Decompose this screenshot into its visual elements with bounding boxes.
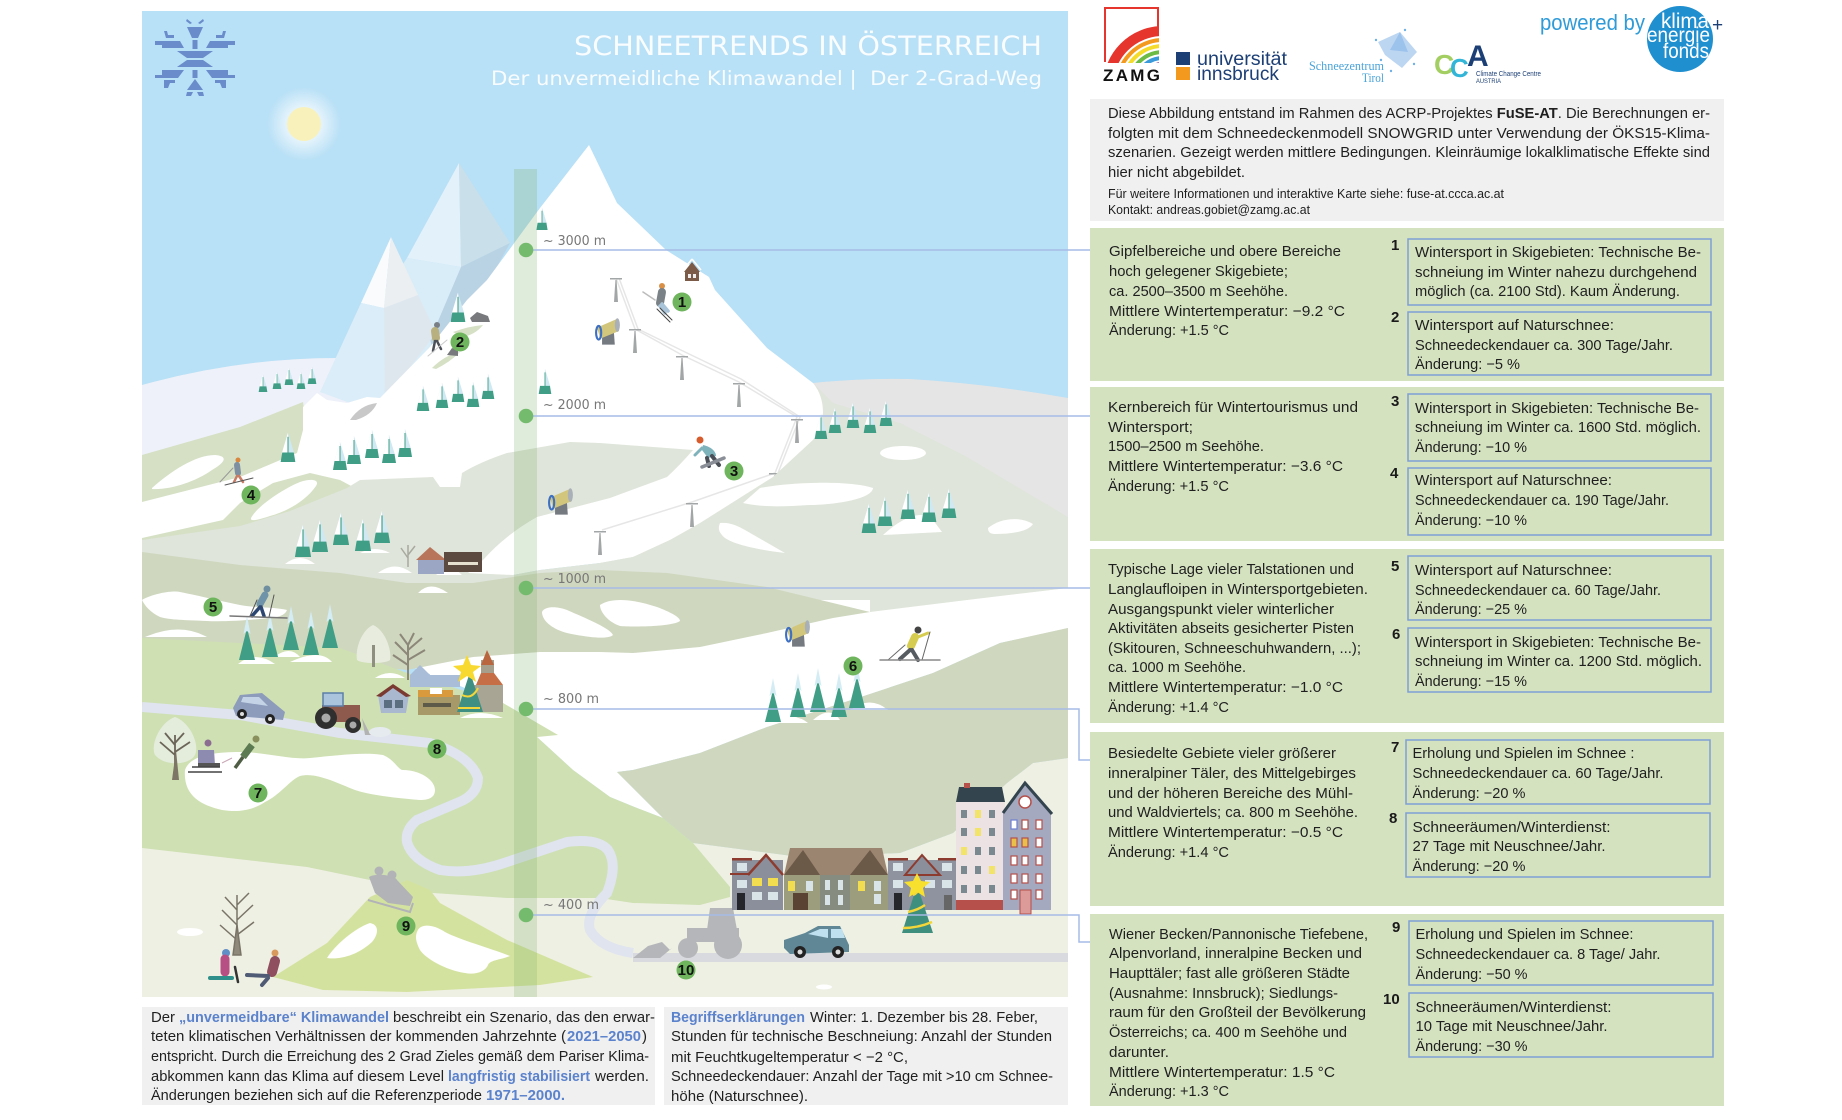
logo: Universität Innsbruck: innsbruck bbox=[1197, 64, 1279, 85]
numbered markers: 2 bbox=[456, 334, 464, 351]
altitude leader lines bbox=[526, 250, 1090, 942]
box 9: Schneedeckendauer ca. 8 Tage/ Jahr. bbox=[1416, 946, 1660, 963]
description 2000 m: 1500–2500 m Seehöhe. bbox=[1108, 438, 1264, 455]
intro panel: szenarien. Gezeigt werden mittlere Bedingungen. Kleinräumige lokalklimatische Effekte sind bbox=[1108, 144, 1710, 161]
text panel: Begriffserklärungen: Schneedeckendauer: Anzahl der Tage mit >10 cm Schnee- bbox=[671, 1068, 1053, 1085]
intro panel: hier nicht abgebildet. bbox=[1108, 164, 1245, 181]
snow band bbox=[407, 588, 1068, 818]
house group right bbox=[888, 855, 956, 910]
village buildings bbox=[376, 665, 460, 715]
subtitle: Der unvermeidliche Klimawandel | Der 2-Grad-Weg bbox=[491, 67, 1042, 90]
description 3000 m: Mittlere Wintertemperatur: −9.2 °C bbox=[1109, 303, 1345, 320]
icon: snowflake logo bbox=[155, 19, 235, 96]
box 10: Änderung: −30 % bbox=[1416, 1038, 1528, 1055]
logo: CCCA: C bbox=[1450, 53, 1469, 83]
sitting people bbox=[210, 949, 278, 985]
box 2: Schneedeckendauer ca. 300 Tage/Jahr. bbox=[1415, 337, 1673, 354]
numbered markers bbox=[204, 292, 862, 980]
gray tobogganers 9 bbox=[368, 866, 413, 912]
text panel: Begriffserklärungen: Winter: 1. Dezember bis 28. Feber, bbox=[810, 1009, 1038, 1026]
ski tourer 4 bbox=[220, 458, 253, 485]
box 3: Wintersport in Skigebieten: Technische Be- bbox=[1415, 400, 1699, 417]
logo: CCCA: A bbox=[1467, 40, 1489, 73]
description 1000 m: Änderung: +1.4 °C bbox=[1108, 699, 1229, 716]
box 9: Änderung: −50 % bbox=[1416, 966, 1528, 983]
box 5: Änderung: −25 % bbox=[1415, 601, 1527, 618]
lift posts bbox=[594, 278, 803, 555]
rocks bbox=[350, 312, 490, 420]
description 400 m: Wiener Becken/Pannonische Tiefebene, bbox=[1109, 926, 1368, 943]
intro panel bbox=[1090, 99, 1724, 221]
description 1000 m: Typische Lage vieler Talstationen und bbox=[1108, 561, 1354, 578]
snow patches in valley bbox=[142, 592, 680, 638]
small bare tree bbox=[401, 545, 415, 567]
description 400 m: raum für den Großteil der Bevölkerung bbox=[1109, 1004, 1366, 1021]
description 400 m: (Ausnahme: Innsbruck); Siedlungs- bbox=[1109, 985, 1338, 1002]
box 1: schneiung im Winter nahezu durchgehend bbox=[1415, 264, 1697, 281]
blue tall house bbox=[1003, 782, 1052, 914]
numbered markers: 5 bbox=[209, 599, 217, 616]
snow patch left hill bbox=[152, 455, 224, 489]
snow mounds bbox=[145, 549, 888, 723]
house group left bbox=[730, 855, 783, 910]
house upper village bbox=[416, 547, 482, 574]
snow patches on right valley bbox=[719, 446, 1033, 553]
snowboarder 3 bbox=[695, 436, 724, 467]
logo: powered by Klima- und Energiefonds: energie bbox=[1647, 24, 1710, 47]
text panel: unvermeidbarer Klimawandel: langfristig stabilisiert bbox=[448, 1068, 590, 1085]
box 6 bbox=[1392, 626, 1711, 692]
description 800 m: inneralpiner Täler, des Mittelgebirges bbox=[1108, 765, 1356, 782]
back peak bbox=[384, 163, 510, 376]
logo: CCCA: AUSTRIA bbox=[1476, 78, 1502, 85]
text panel: unvermeidbarer Klimawandel: 2021–2050 bbox=[567, 1028, 641, 1045]
description 400 m: darunter. bbox=[1109, 1044, 1169, 1061]
skier 1 bbox=[643, 283, 672, 322]
description 800 m: und der höheren Bereiche des Mühl- bbox=[1108, 785, 1353, 802]
panel: 2000 m zone bbox=[1090, 387, 1724, 541]
skier 5 bbox=[230, 586, 287, 618]
description 1000 m: ca. 1000 m Seehöhe. bbox=[1108, 659, 1246, 676]
box 2 bbox=[1391, 309, 1711, 375]
car upper bbox=[233, 693, 285, 724]
box 10: 10 Tage mit Neuschnee/Jahr. bbox=[1416, 1018, 1608, 1035]
numbered markers: 10 bbox=[678, 962, 694, 979]
logo: Schneezentrum Tirol: Schneezentrum bbox=[1309, 58, 1384, 73]
dark valley layer bbox=[142, 552, 870, 670]
box 5 bbox=[1391, 556, 1711, 620]
cable car line bbox=[602, 278, 800, 530]
logo: Schneezentrum Tirol: Tirol bbox=[1362, 70, 1384, 85]
green hill bbox=[142, 638, 730, 905]
description 1000 m: (Skitouren, Schneeschuhwandern, ...); bbox=[1108, 640, 1361, 657]
text panel: unvermeidbarer Klimawandel: 1971–2000. bbox=[486, 1087, 565, 1104]
box 4: 4 bbox=[1390, 465, 1399, 482]
description 3000 m bbox=[1109, 243, 1345, 339]
box 3: 3 bbox=[1391, 393, 1399, 410]
logo: Universität Innsbruck: universität bbox=[1197, 49, 1288, 70]
box 6: Änderung: −15 % bbox=[1415, 673, 1527, 690]
description 3000 m: Änderung: +1.5 °C bbox=[1109, 322, 1229, 339]
box 3: schneiung im Winter ca. 1600 Std. möglich. bbox=[1415, 419, 1701, 436]
text panel: unvermeidbarer Klimawandel: teten klimatischen Verhältnissen der kommenden Jahrzehnte ( bbox=[151, 1028, 566, 1045]
text panel: Begriffserklärungen: Begriffserklärungen bbox=[671, 1009, 805, 1026]
intro panel: Diese Abbildung entstand im Rahmen des ACRP-Projektes FuSE-AT. Die Berechnungen er- bbox=[1108, 105, 1710, 122]
numbered markers: 6 bbox=[849, 658, 857, 675]
icon: sun bbox=[271, 91, 337, 157]
panel: 3000 m zone bbox=[1090, 228, 1724, 381]
box 9: 9 bbox=[1392, 919, 1400, 936]
climber 2 bbox=[428, 322, 447, 356]
text panel: unvermeidbarer Klimawandel: entspricht. Durch die Erreichung des 2 Grad Zieles gemäß dem Pariser Klima- bbox=[151, 1048, 649, 1065]
altitude dots bbox=[519, 243, 533, 922]
lower dark valley bbox=[617, 628, 1068, 857]
logo: CCCA: Climate Change Centre bbox=[1476, 69, 1541, 78]
right valley layer bbox=[601, 386, 1058, 563]
description 800 m: Änderung: +1.4 °C bbox=[1108, 844, 1229, 861]
beige lowland bbox=[142, 758, 1068, 997]
text panel: unvermeidbarer Klimawandel: Änderungen beziehen sich auf die Referenzperiode bbox=[151, 1087, 482, 1104]
box 6: schneiung im Winter ca. 1200 Std. möglich. bbox=[1415, 653, 1702, 670]
box 2: Wintersport auf Naturschnee: bbox=[1415, 317, 1614, 334]
box 8 bbox=[1389, 810, 1710, 877]
box 10: 10 bbox=[1383, 991, 1400, 1008]
description 3000 m: Gipfelbereiche und obere Bereiche bbox=[1109, 243, 1341, 260]
front peak bbox=[320, 237, 436, 403]
box 7: 7 bbox=[1391, 739, 1399, 756]
description 2000 m: Mittlere Wintertemperatur: −3.6 °C bbox=[1108, 458, 1343, 475]
text panel: Begriffserklärungen: mit Feuchtkugeltemperatur < −2 °C, bbox=[671, 1049, 908, 1066]
logo: ZAMG bbox=[1103, 8, 1218, 141]
church bbox=[470, 650, 503, 712]
bare tree bbox=[220, 893, 254, 955]
box 4: Wintersport auf Naturschnee: bbox=[1415, 472, 1612, 489]
box 7 bbox=[1391, 739, 1710, 804]
box 6: Wintersport in Skigebieten: Technische Be- bbox=[1415, 634, 1701, 651]
numbered markers: 1 bbox=[678, 294, 686, 311]
box 8: 8 bbox=[1389, 810, 1397, 827]
numbered markers: 7 bbox=[254, 785, 262, 802]
box 4: Schneedeckendauer ca. 190 Tage/Jahr. bbox=[1415, 492, 1669, 509]
panel: mountain scene bbox=[142, 11, 1068, 997]
box 6: 6 bbox=[1392, 626, 1400, 643]
altitude labels: ~ 400 m bbox=[543, 898, 599, 913]
pink tall house bbox=[956, 783, 1005, 910]
text panel: unvermeidbarer Klimawandel: Der bbox=[151, 1009, 175, 1026]
text panel: unvermeidbarer Klimawandel: „unvermeidbare“ Klimawandel bbox=[179, 1009, 389, 1026]
box 1: 1 bbox=[1391, 237, 1399, 254]
box 1 bbox=[1391, 237, 1711, 305]
snow cannons bbox=[549, 318, 810, 647]
altitude band bbox=[514, 169, 537, 997]
numbered markers: 4 bbox=[247, 487, 256, 504]
car lower bbox=[784, 926, 849, 958]
box 1: möglich (ca. 2100 Std). Kaum Änderung. bbox=[1415, 283, 1680, 300]
description 1000 m: Langlaufloipen in Wintersportgebieten. bbox=[1108, 581, 1368, 598]
box 9: Erholung und Spielen im Schnee: bbox=[1416, 926, 1634, 943]
tractor upper bbox=[315, 693, 376, 735]
description 1000 m: Mittlere Wintertemperatur: −1.0 °C bbox=[1108, 679, 1343, 696]
altitude labels: ~ 1000 m bbox=[543, 572, 606, 587]
snow patch lower left bbox=[251, 480, 317, 520]
left green hill bbox=[142, 402, 304, 502]
christmas tree village bbox=[453, 655, 483, 712]
description 400 m: Alpenvorland, inneralpine Becken und bbox=[1109, 945, 1362, 962]
numbered markers: 8 bbox=[433, 741, 441, 758]
box 2: Änderung: −5 % bbox=[1415, 356, 1520, 373]
logo: CCCA bbox=[1434, 40, 1541, 85]
logo: powered by Klima- und Energiefonds: klima bbox=[1661, 10, 1709, 33]
mountain hut bbox=[683, 259, 701, 281]
description 800 m: Mittlere Wintertemperatur: −0.5 °C bbox=[1108, 824, 1343, 841]
box 4: Änderung: −10 % bbox=[1415, 512, 1527, 529]
text panel: unvermeidbarer Klimawandel bbox=[142, 1007, 655, 1105]
panel: 1000 m zone bbox=[1090, 549, 1724, 723]
snow on small hill bbox=[177, 923, 832, 990]
mansion bbox=[784, 848, 888, 910]
box 7: Schneedeckendauer ca. 60 Tage/Jahr. bbox=[1412, 765, 1664, 782]
description 2000 m: Wintersport; bbox=[1108, 419, 1193, 436]
title: SCHNEETRENDS IN ÖSTERREICH bbox=[574, 30, 1042, 62]
text panel: Begriffserklärungen bbox=[664, 1007, 1068, 1105]
box 3 bbox=[1391, 393, 1711, 461]
intro panel: folgten mit dem Schneedeckenmodell SNOWGRID unter Verwendung der ÖKS15-Klima- bbox=[1108, 124, 1710, 142]
town bbox=[730, 782, 1052, 914]
panel: 400 m zone bbox=[1090, 914, 1724, 1106]
box 5: Schneedeckendauer ca. 60 Tage/Jahr. bbox=[1415, 582, 1661, 599]
box 7: Erholung und Spielen im Schnee : bbox=[1412, 745, 1634, 762]
description 800 m: und Waldviertels; ca. 800 m Seehöhe. bbox=[1108, 804, 1358, 821]
description 3000 m: ca. 2500–3500 m Seehöhe. bbox=[1109, 283, 1288, 300]
small hill bbox=[273, 880, 593, 992]
christmas tree town bbox=[902, 873, 933, 933]
logo: powered by Klima- und Energiefonds bbox=[1540, 6, 1723, 72]
text panel: unvermeidbarer Klimawandel: beschreibt ein Szenario, das den erwar- bbox=[393, 1009, 655, 1026]
box 8: 27 Tage mit Neuschnee/Jahr. bbox=[1412, 838, 1606, 855]
box 7: Änderung: −20 % bbox=[1412, 785, 1526, 802]
logo: powered by Klima- und Energiefonds: powered by bbox=[1540, 10, 1645, 35]
far hills bbox=[142, 358, 1068, 517]
description 400 m: Österreichs; ca. 400 m Seehöhe und bbox=[1109, 1023, 1347, 1041]
snow pile plow bbox=[369, 727, 391, 737]
altitude labels: ~ 3000 m bbox=[543, 234, 606, 249]
box 4 bbox=[1390, 465, 1711, 535]
sledders bbox=[188, 736, 260, 772]
road bbox=[142, 707, 633, 953]
logo: CCCA: C bbox=[1434, 49, 1454, 80]
skier 6 bbox=[880, 626, 940, 660]
text panel: unvermeidbarer Klimawandel: abkommen kann das Klima auf diesem Level bbox=[151, 1068, 444, 1085]
box 8: Schneeräumen/Winterdienst: bbox=[1412, 819, 1610, 836]
numbered markers: 3 bbox=[730, 463, 738, 480]
box 1: Wintersport in Skigebieten: Technische Be- bbox=[1415, 244, 1701, 261]
main road bbox=[633, 953, 1068, 962]
box 8: Änderung: −20 % bbox=[1412, 858, 1526, 875]
logo: ZAMG: ZAMG bbox=[1103, 66, 1160, 85]
logo: Universität Innsbruck bbox=[1176, 49, 1288, 85]
logo: powered by Klima- und Energiefonds: + bbox=[1712, 15, 1723, 36]
box 10: Schneeräumen/Winterdienst: bbox=[1416, 999, 1612, 1016]
intro panel: Für weitere Informationen und interaktive Karte siehe: fuse-at.ccca.ac.at bbox=[1108, 187, 1505, 201]
text panel: unvermeidbarer Klimawandel: werden. bbox=[594, 1068, 649, 1085]
box 2: 2 bbox=[1391, 309, 1399, 326]
box 9 bbox=[1392, 919, 1713, 985]
tree 7 bbox=[154, 717, 196, 780]
description 800 m bbox=[1108, 745, 1358, 861]
description 1000 m: Ausgangspunkt vieler winterlicher bbox=[1108, 601, 1334, 618]
text panel: unvermeidbarer Klimawandel: ) bbox=[642, 1028, 647, 1045]
box 10 bbox=[1383, 991, 1713, 1057]
description 2000 m: Änderung: +1.5 °C bbox=[1108, 478, 1229, 495]
box 3: Änderung: −10 % bbox=[1415, 439, 1527, 456]
gray tractor 10 bbox=[633, 908, 742, 959]
green band lower left bbox=[142, 473, 353, 545]
conifers bbox=[239, 208, 956, 722]
description 400 m: Änderung: +1.3 °C bbox=[1109, 1083, 1229, 1100]
description 2000 m bbox=[1108, 399, 1358, 495]
box 5: Wintersport auf Naturschnee: bbox=[1415, 562, 1612, 579]
description 1000 m: Aktivitäten abseits gesicherter Pisten bbox=[1108, 620, 1354, 637]
description 3000 m: hoch gelegener Skigebiete; bbox=[1109, 263, 1288, 280]
main snow mountain bbox=[142, 145, 823, 620]
winter trees bbox=[357, 625, 425, 680]
description 400 m: Mittlere Wintertemperatur: 1.5 °C bbox=[1109, 1064, 1335, 1081]
description 1000 m bbox=[1108, 561, 1368, 716]
altitude labels: ~ 2000 m bbox=[543, 398, 606, 413]
snow patch 7 bbox=[185, 752, 435, 811]
numbered markers: 9 bbox=[402, 918, 410, 935]
description 400 m: Haupttäler; fast alle größeren Städte bbox=[1109, 965, 1350, 982]
text panel: Begriffserklärungen: höhe (Naturschnee). bbox=[671, 1088, 808, 1105]
valley overlay bbox=[142, 440, 813, 583]
box 5: 5 bbox=[1391, 558, 1399, 575]
text panel: Begriffserklärungen: Stunden für technische Beschneiung: Anzahl der Stunden bbox=[671, 1028, 1052, 1045]
intro panel: Kontakt: andreas.gobiet@zamg.ac.at bbox=[1108, 203, 1311, 217]
description 2000 m: Kernbereich für Wintertourismus und bbox=[1108, 399, 1358, 416]
logo: powered by Klima- und Energiefonds: fonds bbox=[1663, 40, 1709, 63]
altitude labels bbox=[543, 234, 606, 913]
altitude labels: ~ 800 m bbox=[543, 692, 599, 707]
description 400 m bbox=[1109, 926, 1368, 1100]
logo: Schneezentrum Tirol bbox=[1309, 29, 1417, 85]
description 800 m: Besiedelte Gebiete vieler größerer bbox=[1108, 745, 1336, 762]
panel: 800 m zone bbox=[1090, 732, 1724, 906]
